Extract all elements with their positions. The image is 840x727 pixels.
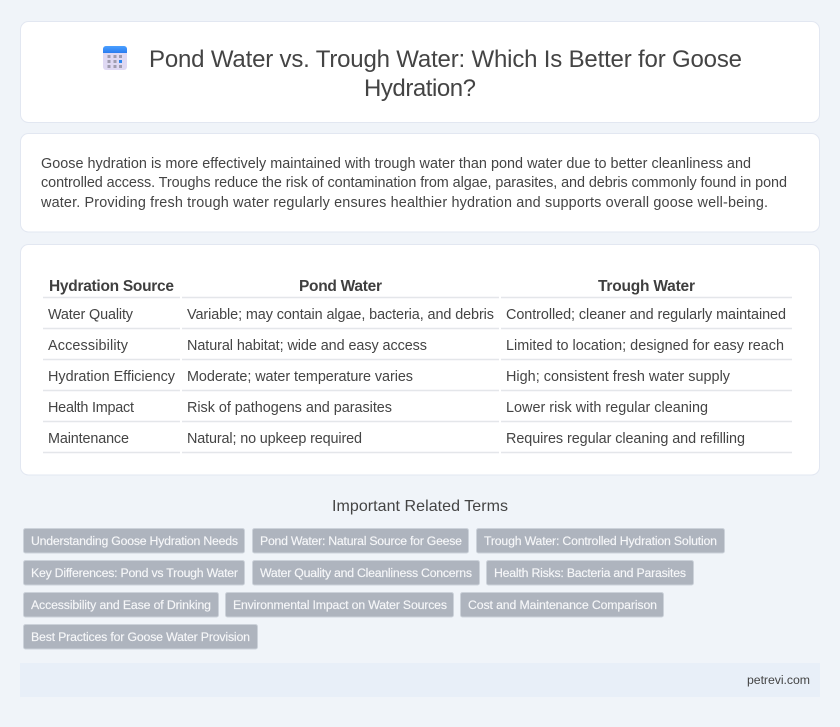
table row: health impact: Risk of pathogens and parasites: [187, 400, 392, 416]
footer source: petrevi.com: [747, 673, 810, 687]
table row: health impact: Lower risk with regular cleaning: [506, 400, 708, 416]
table row: hydration efficiency: Hydration Efficiency: [48, 369, 176, 385]
tag: Best Practices for Goose Water Provision: [31, 630, 250, 644]
tag: Pond Water: Natural Source for Geese: [260, 534, 462, 548]
tag: [24, 592, 218, 617]
footer bar: [20, 663, 820, 697]
table header row: Trough Water: [598, 278, 695, 295]
table row: hydration efficiency: Moderate; water temperature varies: [187, 369, 413, 385]
title: Pond Water vs. Trough Water: Which Is Better for Goose: [149, 46, 742, 73]
table row: hydration efficiency: High; consistent fresh water supply: [506, 369, 731, 385]
table row: accessibility: [48, 338, 784, 354]
table row: accessibility: Natural habitat; wide and easy access: [187, 338, 427, 354]
table row: maintenance: [48, 431, 745, 447]
tag: [486, 560, 694, 585]
table row: accessibility: Accessibility: [48, 338, 129, 354]
title: Hydration?: [364, 75, 476, 102]
text block: description: [40, 156, 787, 211]
tag: Trough Water: Controlled Hydration Solution: [484, 534, 717, 548]
tag: [476, 528, 724, 553]
title: [149, 46, 742, 102]
table row: maintenance: Natural; no upkeep required: [187, 431, 362, 447]
table row: hydration efficiency: [48, 369, 731, 385]
icon: calendar: [103, 46, 127, 70]
panel: title header: [20, 22, 820, 122]
related term tags: [24, 528, 724, 649]
heading: related terms: Important Related Terms: [332, 498, 508, 515]
table row: water quality: [48, 307, 786, 323]
panel: comparison table: [20, 244, 820, 475]
tag: [460, 592, 664, 617]
tag: Accessibility and Ease of Drinking: [31, 598, 211, 612]
table header row: Pond Water: [299, 278, 382, 295]
tag: Understanding Goose Hydration Needs: [31, 534, 238, 548]
table row: maintenance: Requires regular cleaning and refilling: [506, 431, 745, 447]
table header row: [49, 278, 695, 295]
tag: Health Risks: Bacteria and Parasites: [494, 566, 686, 580]
table header row: Hydration Source: [49, 278, 174, 295]
tag: [252, 528, 468, 553]
panel: description: [20, 134, 820, 232]
tag: [24, 528, 244, 553]
table row: water quality: Controlled; cleaner and regularly maintained: [506, 307, 786, 323]
tag: Cost and Maintenance Comparison: [468, 598, 657, 612]
tag: Water Quality and Cleanliness Concerns: [260, 566, 472, 580]
text block: description: Goose hydration is more effectively maintained with trough water than pond water due to better cleanliness and: [41, 156, 751, 172]
tag: Environmental Impact on Water Sources: [233, 598, 447, 612]
tag: [252, 560, 480, 585]
table row: accessibility: Limited to location; designed for easy reach: [506, 338, 784, 354]
tag: [24, 624, 258, 649]
table row: water quality: Variable; may contain algae, bacteria, and debris: [187, 307, 494, 323]
tag: [226, 592, 454, 617]
table row: maintenance: Maintenance: [48, 431, 129, 447]
table row: health impact: [48, 400, 708, 416]
text block: description: controlled access. Troughs reduce the risk of contamination from algae, parasites, and debris commonly found in pond: [41, 175, 787, 191]
table row: health impact: Health Impact: [48, 400, 134, 416]
text block: description: water. Providing fresh trough water regularly ensures healthier hydration and supports overall goose well-being.: [40, 195, 768, 211]
table row: water quality: Water Quality: [48, 307, 134, 323]
tag: Key Differences: Pond vs Trough Water: [31, 566, 238, 580]
tag: [24, 560, 244, 585]
